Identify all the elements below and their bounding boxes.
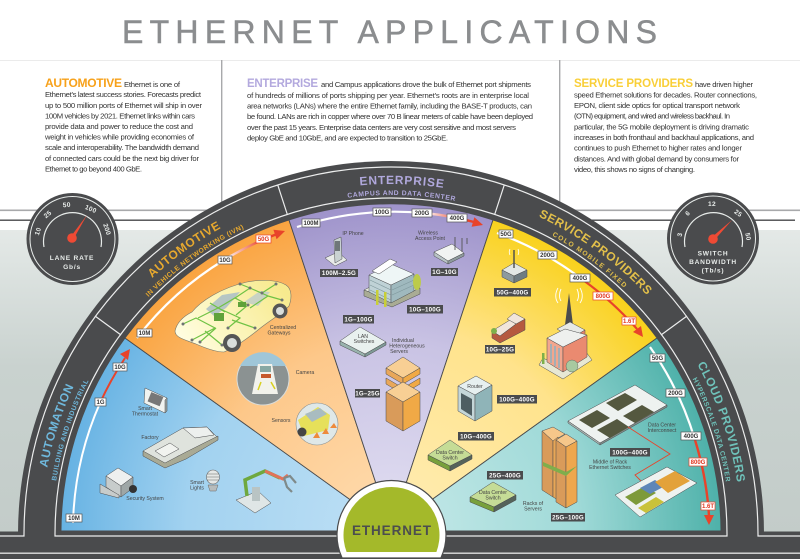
icon: sensors inset: Sensors (271, 418, 291, 424)
text block: automotive: Ethernet's latest success stories. Forecasts predict (45, 90, 202, 99)
chip: 1G–25G (355, 390, 380, 398)
gauge: switch bandwidth: 50 (743, 232, 752, 241)
icon: car with network (175, 280, 296, 352)
gauge: switch bandwidth: SWITCH (698, 250, 728, 258)
text block: service providers: have driven higher (695, 80, 753, 89)
speed arc: automation: 10G (114, 365, 126, 371)
gauge: switch bandwidth: 3 (677, 232, 684, 237)
text block: automotive: Ethernet is one of (124, 80, 181, 89)
icon: tower building (539, 288, 592, 379)
gauge: lane rate: 10 (34, 227, 43, 236)
ethernet dome (337, 480, 446, 558)
gauge: lane rate: 25 (43, 210, 53, 220)
icon: core switch (428, 440, 472, 471)
text block: automotive: up to 500 million ports of Ethernet will ship in over (45, 101, 202, 110)
gauge: lane rate: 100 (84, 204, 97, 215)
band label: service providers: SERVICE PROVIDERS (540, 210, 652, 294)
text block: service providers (574, 78, 757, 174)
text block: automotive: weight in vehicles while providing economies of (44, 132, 195, 142)
chip: 10G–100G (409, 306, 441, 314)
icon: data center switch: Data Center (479, 490, 507, 496)
gauge: switch bandwidth: 6 (684, 210, 692, 218)
chip: 25G–400G (489, 472, 521, 480)
panel: enterprise (289, 204, 493, 529)
icon: smart lights (190, 470, 220, 492)
band label: enterprise: ENTERPRISE (360, 176, 444, 188)
icon: smart lights: Lights (190, 486, 204, 492)
text block: enterprise (247, 78, 533, 142)
speed arc: enterprise (297, 208, 483, 227)
icon: IP phone: IP Phone (342, 231, 364, 237)
speed arc: service providers: 800G (596, 294, 611, 300)
panel: automotive (125, 220, 391, 529)
text block: enterprise: area networks (LANs) where the entire Ethernet family, including the BASE-T products, can (247, 102, 532, 110)
band label: cloud providers: CLOUD PROVIDERS (698, 362, 745, 482)
speed arc: cloud providers: 400G (684, 434, 699, 440)
icon: wireless access point: Wireless (418, 230, 438, 236)
chip: 50G–400G (497, 290, 528, 296)
text block: service providers: (OTN) equipment, and wired and wireless backhaul. In (574, 112, 730, 120)
chip: 1G–10G (432, 269, 457, 276)
icon: office building (364, 259, 421, 307)
icon: LAN switch: LAN (358, 334, 368, 340)
text block: automotive: provide data and power to reduce the cost and (45, 122, 193, 131)
connection line (628, 427, 670, 482)
gauge: switch bandwidth: (Tb/s) (702, 268, 724, 274)
icon: red campus building (491, 313, 525, 343)
ethernet dome: ETHERNET (352, 523, 432, 538)
icon: smart thermostat: Smart (138, 406, 152, 412)
gauge: lane rate: 200 (101, 223, 112, 236)
icon: wireless access point (415, 230, 467, 264)
icon: data center switch (470, 482, 516, 512)
icon: small tower (502, 249, 527, 283)
text block: automotive: AUTOMOTIVE (45, 76, 122, 90)
speed arc: cloud providers: 50G (652, 356, 664, 362)
icon: router: Router (467, 384, 483, 390)
gauge: switch bandwidth: 12 (708, 201, 716, 208)
band sublabel: service providers: COLO MOBILE FIXED (553, 232, 626, 287)
icon: leaf switches rack (589, 460, 697, 517)
gauge: lane rate: 50 (63, 202, 71, 209)
icon: camera inset: Camera (296, 370, 314, 376)
text block: service providers: continues to push Ethernet to higher rates and longer (574, 144, 742, 152)
icon: sensors inset (271, 403, 338, 445)
speed arc: enterprise: 100M (303, 221, 319, 227)
icon: leaf switches rack: Middle of Rack (593, 460, 628, 466)
speed arc: automation (66, 349, 130, 523)
speed arc: automation: 10M (68, 516, 80, 522)
icon: servers: Individual (392, 338, 414, 344)
band sublabel: automotive: IN VEHICLE NETWORKING (IVN) (146, 224, 244, 297)
band sublabel: cloud providers: HYPERSCALE DATA CENTER (692, 377, 730, 482)
gauge: switch bandwidth: 25 (733, 209, 743, 219)
text block: enterprise: be found. LANs are rich in copper where over 70 B linear meters of cable have been deployed (247, 112, 533, 121)
chip: 100M–2.5G (322, 270, 356, 277)
text block: enterprise: of hundreds of millions of ports shipping per year. Ethernet's roots are in enterprise local (247, 91, 529, 100)
icon: smart thermostat: Thermostat (132, 412, 159, 418)
text block: service providers: SERVICE PROVIDERS (574, 78, 693, 90)
icon: servers: Servers (390, 349, 408, 355)
speed arc: automotive: 10G (219, 258, 231, 264)
panel: service providers (391, 220, 657, 529)
band sublabel: enterprise: CAMPUS AND DATA CENTER (348, 190, 456, 201)
speed arc: service providers: 1.6T (623, 319, 635, 325)
band label: automation: AUTOMATION (40, 384, 74, 468)
icon: spine switches rack: Data Center (648, 422, 676, 428)
icon: server towers: Racks of (523, 501, 544, 507)
icon: server towers: Servers (524, 506, 542, 512)
icon: LAN switch (340, 327, 386, 357)
speed arc: service providers (497, 230, 643, 337)
text block: service providers: EPON, client side optics for optical transport network (574, 101, 740, 110)
icon: spine switches rack: Interconnect (648, 428, 677, 434)
icon: robot arm (236, 471, 296, 513)
speed arc: automotive: 10M (139, 331, 150, 337)
text block: automotive (44, 76, 202, 174)
icon: smart thermostat (132, 388, 167, 418)
speed arc: automotive (137, 230, 285, 338)
speed arc: automation: 1G (96, 400, 105, 406)
icon: LAN switch: Switches (354, 339, 375, 345)
gauge: lane rate (26, 193, 118, 285)
text block: automotive: scale and interoperability. The bandwidth demand (45, 143, 199, 152)
arch band (0, 161, 800, 559)
text block: service providers: increases in both fronthaul and backhaul applications, and (574, 133, 754, 142)
text block: service providers: particular, the 5G mobile deployment is driving dramatic (574, 122, 749, 132)
speed arc: cloud providers: 800G (691, 460, 706, 466)
chip: 10G–25G (486, 346, 514, 354)
icon: camera inset (237, 352, 314, 405)
text block: service providers: speed Ethernet solutions for decades. Router connections, (574, 90, 757, 100)
text block: enterprise: and Campus applications drove the bulk of Ethernet port shipments (321, 80, 531, 89)
speed arc: enterprise: 100G (375, 210, 390, 216)
chip: 10G–400G (460, 434, 492, 440)
speed arc: enterprise: 200G (415, 211, 430, 217)
text block: service providers: video, this shows no signs of changing. (574, 165, 695, 174)
panel: cloud providers (391, 338, 721, 531)
text block: automotive: 100M vehicles by 2021. Ethernet links within cars (45, 112, 195, 120)
text block: enterprise: over the past 15 years. Enterprise data centers are very cost sensitive and most servers (247, 123, 516, 132)
speed arc: service providers: 50G (500, 232, 512, 238)
text block: enterprise: deploy GbE and 10GbE, and are expected to transition to 25GbE. (247, 134, 448, 142)
icon: core switch: Data Center (436, 450, 464, 456)
icon: car with network: Centralized (270, 325, 296, 331)
icon: core switch: Switch (442, 456, 458, 462)
chip: 100G–400G (612, 450, 648, 456)
title: ETHERNET APPLICATIONS (122, 14, 657, 50)
icon: data center switch: Switch (485, 496, 501, 502)
icon: smart lights: Smart (190, 480, 204, 486)
icon: factory (141, 427, 218, 468)
gauge: lane rate: Gb/s (63, 264, 81, 271)
band sublabel: automation: BUILDING AND INDUSTRIAL (52, 380, 88, 480)
chip: 100G–400G (499, 396, 535, 404)
band label: automotive: AUTOMOTIVE (149, 221, 220, 278)
icon: spine switches rack (568, 385, 677, 445)
icon: servers (386, 338, 425, 431)
speed arc: cloud providers: 200G (668, 391, 683, 397)
text block: automotive: of connected cars could be the next big driver for (45, 154, 199, 163)
speed arc: service providers: 400G (573, 276, 588, 282)
icon: leaf switches rack: Ethernet Switches (589, 465, 631, 471)
speed arc: automotive: 50G (258, 237, 270, 243)
icon: router (458, 376, 492, 421)
icon: car with network: Gateways (267, 330, 291, 336)
icon: security camera (100, 468, 164, 502)
text block: service providers: distances. And with global demand by consumers for (574, 154, 739, 164)
chip: 25G–100G (552, 514, 584, 522)
speed arc: cloud providers (650, 347, 715, 525)
speed arc: cloud providers: 1.6T (702, 504, 714, 510)
panel: automation (61, 338, 391, 531)
icon: IP phone (325, 231, 364, 266)
icon: factory: Factory (141, 435, 159, 441)
speed arc: enterprise: 400G (450, 216, 465, 222)
chip: 1G–100G (344, 316, 373, 324)
icon: servers: Heterogeneous (389, 344, 425, 350)
gauge: lane rate: LANE RATE (50, 255, 94, 262)
gauge: switch bandwidth: BANDWIDTH (689, 259, 737, 266)
gauge: switch bandwidth (667, 192, 759, 284)
text block: automotive: Ethernet to go beyond 400 GbE. (45, 164, 142, 174)
text block: enterprise: ENTERPRISE (247, 78, 318, 90)
speed arc: service providers: 200G (540, 253, 555, 259)
icon: server towers (523, 427, 577, 512)
icon: security camera: Security System (126, 496, 164, 502)
icon: wireless access point: Access Point (415, 236, 446, 242)
